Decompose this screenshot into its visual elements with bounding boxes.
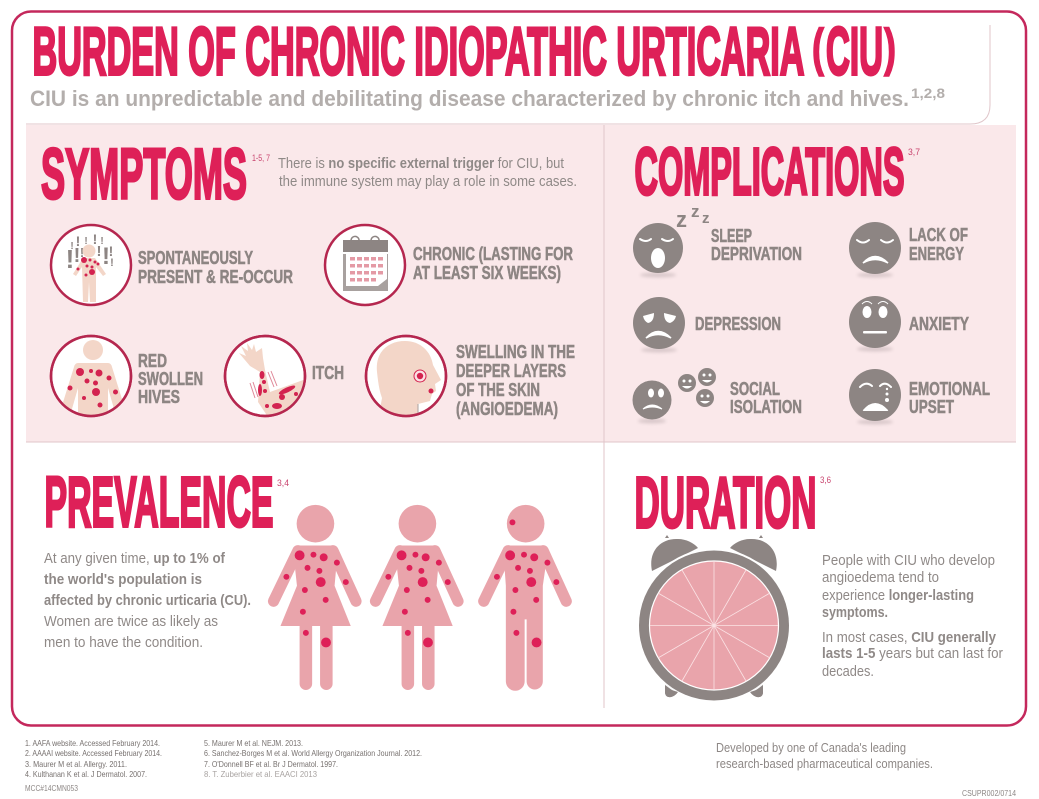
icon: lack of energy face xyxy=(849,222,901,278)
references: 3. Maurer M et al. Allergy. 2011. xyxy=(25,759,127,769)
icon: person with exclamation marks xyxy=(51,225,131,305)
panel: prevalence xyxy=(44,464,566,691)
heading: symptoms: 1-5, 7 xyxy=(252,153,270,163)
label: emotional upset: EMOTIONAL xyxy=(909,379,990,399)
icon: sleep face: z xyxy=(691,202,700,221)
symptoms intro text: the immune system may play a role in some cases. xyxy=(279,173,577,190)
icon: depression face xyxy=(633,297,685,352)
label: swelling: (ANGIOEDEMA) xyxy=(456,399,558,419)
prevalence text: men to have the condition. xyxy=(44,634,203,651)
symptoms intro text xyxy=(278,155,577,190)
icon: person with exclamation marks: ! xyxy=(100,236,104,247)
prevalence text: the world's population is xyxy=(44,571,202,588)
heading: prevalence xyxy=(44,464,289,542)
label: spontaneously: PRESENT & RE-OCCUR xyxy=(138,267,293,287)
references: 1. AAFA website. Accessed February 2014. xyxy=(25,738,160,748)
label: red swollen hives: RED xyxy=(138,351,167,371)
panel: symptoms xyxy=(41,136,577,420)
heading: symptoms xyxy=(41,136,270,214)
heading: complications: 3,7 xyxy=(908,147,920,157)
icon: calendar xyxy=(325,225,405,305)
duration text: decades. xyxy=(822,663,874,680)
icon: social isolation faces xyxy=(632,368,716,424)
icon: head with swelling xyxy=(366,336,446,420)
heading: prevalence: PREVALENCE xyxy=(44,464,274,542)
developed by note xyxy=(716,740,933,771)
prevalence text: Women are twice as likely as xyxy=(44,613,218,630)
icon: body with hives xyxy=(51,336,131,420)
icon: person with exclamation marks: ! xyxy=(84,236,88,247)
duration text xyxy=(822,552,1003,680)
label: red swollen hives: SWOLLEN xyxy=(138,369,203,389)
heading: duration xyxy=(634,464,831,544)
icon: person with exclamation marks: ! xyxy=(102,243,110,270)
references: 4. Kulthanan K et al. J Dermatol. 2007. xyxy=(25,769,147,779)
references: 7. O'Donnell BF et al. Br J Dermatol. 1997. xyxy=(204,759,338,769)
references: 2. AAAAI website. Accessed February 2014. xyxy=(25,748,162,758)
label: sleep deprivation xyxy=(711,226,802,264)
label: sleep deprivation: SLEEP xyxy=(711,226,752,246)
icon: person with exclamation marks: ! xyxy=(70,241,74,252)
heading: duration: DURATION xyxy=(634,464,816,544)
label: social isolation xyxy=(730,379,802,417)
icon: sleep face xyxy=(633,202,710,278)
label: spontaneously: SPONTANEOUSLY xyxy=(138,248,253,268)
figure: woman two xyxy=(376,505,458,690)
label: swelling xyxy=(456,342,575,419)
figure: man xyxy=(484,505,566,691)
icon: alarm clock xyxy=(637,535,791,702)
prevalence text xyxy=(44,550,251,651)
label: emotional upset: UPSET xyxy=(909,397,954,417)
symptoms intro text: There is no specific external trigger for CIU, but xyxy=(278,155,565,172)
label: sleep deprivation: DEPRIVATION xyxy=(711,244,802,264)
label: red swollen hives xyxy=(138,351,203,407)
figures with hives xyxy=(274,505,566,691)
label: red swollen hives: HIVES xyxy=(138,387,180,407)
icon: emotional upset face xyxy=(849,369,901,424)
figure: woman one xyxy=(274,505,356,690)
label: depression: DEPRESSION xyxy=(695,314,781,334)
label: itch: ITCH xyxy=(312,363,344,383)
label: spontaneously xyxy=(138,248,293,287)
icon: itching arm xyxy=(225,336,306,420)
title: ( xyxy=(812,19,824,77)
prevalence text: affected by chronic urticaria (CU). xyxy=(44,592,251,609)
label: chronic: AT LEAST SIX WEEKS) xyxy=(413,263,561,283)
references: 8. T. Zuberbier et al. EAACI 2013 xyxy=(204,769,317,779)
label: lack of energy: LACK OF xyxy=(909,225,968,245)
label: swelling: DEEPER LAYERS xyxy=(456,361,566,381)
icon: person with exclamation marks: ! xyxy=(109,243,113,259)
duration text: In most cases, CIU generally xyxy=(822,629,997,646)
icon: person with exclamation marks: ! xyxy=(76,233,80,249)
label: emotional upset xyxy=(909,379,990,417)
icon: person with exclamation marks: ! xyxy=(66,244,74,274)
icon: person with exclamation marks: ! xyxy=(74,245,80,267)
panel: duration xyxy=(634,464,1003,702)
references xyxy=(25,738,422,793)
references: 6. Sanchez-Borges M et al. World Allergy Organization Journal. 2012. xyxy=(204,748,422,758)
icon: person with exclamation marks: ! xyxy=(110,257,114,269)
icon: anxiety face xyxy=(849,296,901,352)
label: lack of energy: ENERGY xyxy=(909,244,964,264)
label: lack of energy xyxy=(909,225,968,264)
panel: complications xyxy=(632,134,990,424)
panel: symptoms and complications background xyxy=(26,125,1016,442)
duration text: experience longer-lasting xyxy=(822,587,974,604)
subtitle: 1,2,8 xyxy=(911,85,945,101)
heading: symptoms: SYMPTOMS xyxy=(41,136,247,214)
icon: person with exclamation marks: ! xyxy=(96,243,102,260)
icon: person with exclamation marks: ! xyxy=(93,231,97,247)
label: social isolation: ISOLATION xyxy=(730,397,802,417)
heading: duration: 3,6 xyxy=(820,475,831,485)
icon: sleep face: z xyxy=(676,207,687,232)
heading: prevalence: 3,4 xyxy=(277,478,289,488)
developed by note: research-based pharmaceutical companies. xyxy=(716,756,933,771)
developed by note: Developed by one of Canada's leading xyxy=(716,740,906,755)
label: chronic: CHRONIC (LASTING FOR xyxy=(413,244,573,264)
references: MCC#14CMN053 xyxy=(25,784,78,793)
document code: CSUPR002/0714 xyxy=(962,789,1016,798)
duration text: symptoms. xyxy=(822,604,888,621)
duration text: angioedema tend to xyxy=(822,569,939,586)
icon: person with exclamation marks: ! xyxy=(80,245,84,260)
duration text: People with CIU who develop xyxy=(822,552,995,569)
prevalence text: At any given time, up to 1% of xyxy=(44,550,226,567)
duration text: lasts 1-5 years but can last for xyxy=(822,645,1003,662)
title: CIU xyxy=(826,14,883,90)
icon: sleep face: z xyxy=(702,210,710,227)
label: swelling: SWELLING IN THE xyxy=(456,342,575,362)
references: 5. Maurer M et al. NEJM. 2013. xyxy=(204,738,303,748)
label: swelling: OF THE SKIN xyxy=(456,380,540,400)
subtitle: CIU is an unpredictable and debilitating disease characterized by chronic itch and hives. xyxy=(30,86,909,111)
title: ) xyxy=(884,19,896,77)
label: social isolation: SOCIAL xyxy=(730,379,780,399)
label: anxiety: ANXIETY xyxy=(909,314,969,334)
label: chronic xyxy=(413,244,573,283)
